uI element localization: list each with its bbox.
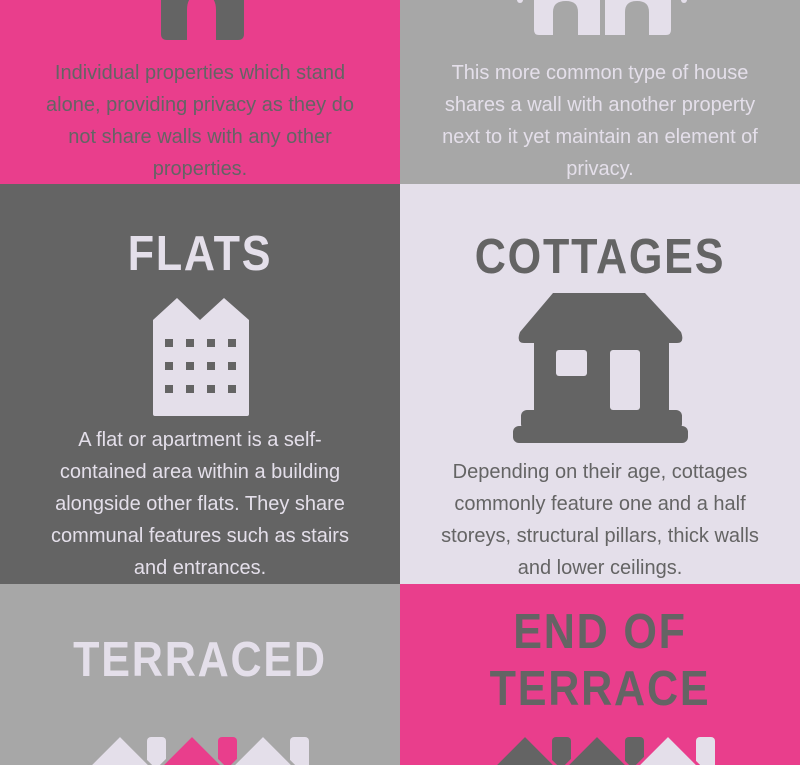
heading: end of terrace	[490, 605, 710, 716]
text: cottages description: commonly feature one and a half	[454, 493, 746, 515]
text: semi-detached description: next to it yet maintain an element of	[442, 126, 758, 148]
text: detached description: properties.	[153, 158, 247, 180]
icon: semi-detached houses	[517, 0, 687, 35]
text: detached description: Individual properties which stand	[55, 62, 345, 84]
heading: terraced: TERRACED	[73, 633, 327, 687]
heading: cottages: COTTAGES	[475, 230, 725, 284]
text: cottages description: storeys, structural pillars, thick walls	[441, 525, 759, 547]
text: detached description: alone, providing privacy as they do	[46, 94, 354, 116]
text: detached description: not share walls with any other	[68, 126, 332, 148]
text: semi-detached description: shares a wall with another property	[445, 94, 755, 116]
text: cottages description: and lower ceilings.	[518, 557, 682, 579]
panel: terraced	[0, 584, 400, 765]
icon: end of terrace houses	[497, 737, 715, 765]
panel: detached	[0, 0, 400, 184]
text: flats description: alongside other flats. They share	[55, 493, 345, 515]
text: flats description: and entrances.	[134, 557, 266, 579]
text: flats description	[51, 429, 349, 579]
text: semi-detached description	[442, 62, 758, 180]
panel: semi-detached	[400, 0, 800, 184]
panel: cottages	[400, 184, 800, 584]
icon: cottage	[513, 293, 688, 443]
panel: end of terrace	[400, 584, 800, 765]
text: semi-detached description: This more common type of house	[452, 62, 748, 84]
text: flats description: contained area within a building	[60, 461, 340, 483]
heading: end of terrace: TERRACE	[490, 662, 710, 716]
icon: detached house	[161, 0, 244, 40]
text: cottages description: Depending on their age, cottages	[453, 461, 747, 483]
text: flats description: communal features such as stairs	[51, 525, 349, 547]
heading: flats: FLATS	[128, 227, 272, 281]
text: cottages description	[441, 461, 759, 579]
heading: end of terrace: END OF	[513, 605, 687, 659]
text: detached description	[46, 62, 354, 180]
icon: flats building	[153, 298, 249, 416]
panel: flats	[0, 184, 400, 584]
text: semi-detached description: privacy.	[566, 158, 634, 180]
icon: terraced houses	[92, 737, 309, 765]
text: flats description: A flat or apartment is a self-	[78, 429, 322, 451]
